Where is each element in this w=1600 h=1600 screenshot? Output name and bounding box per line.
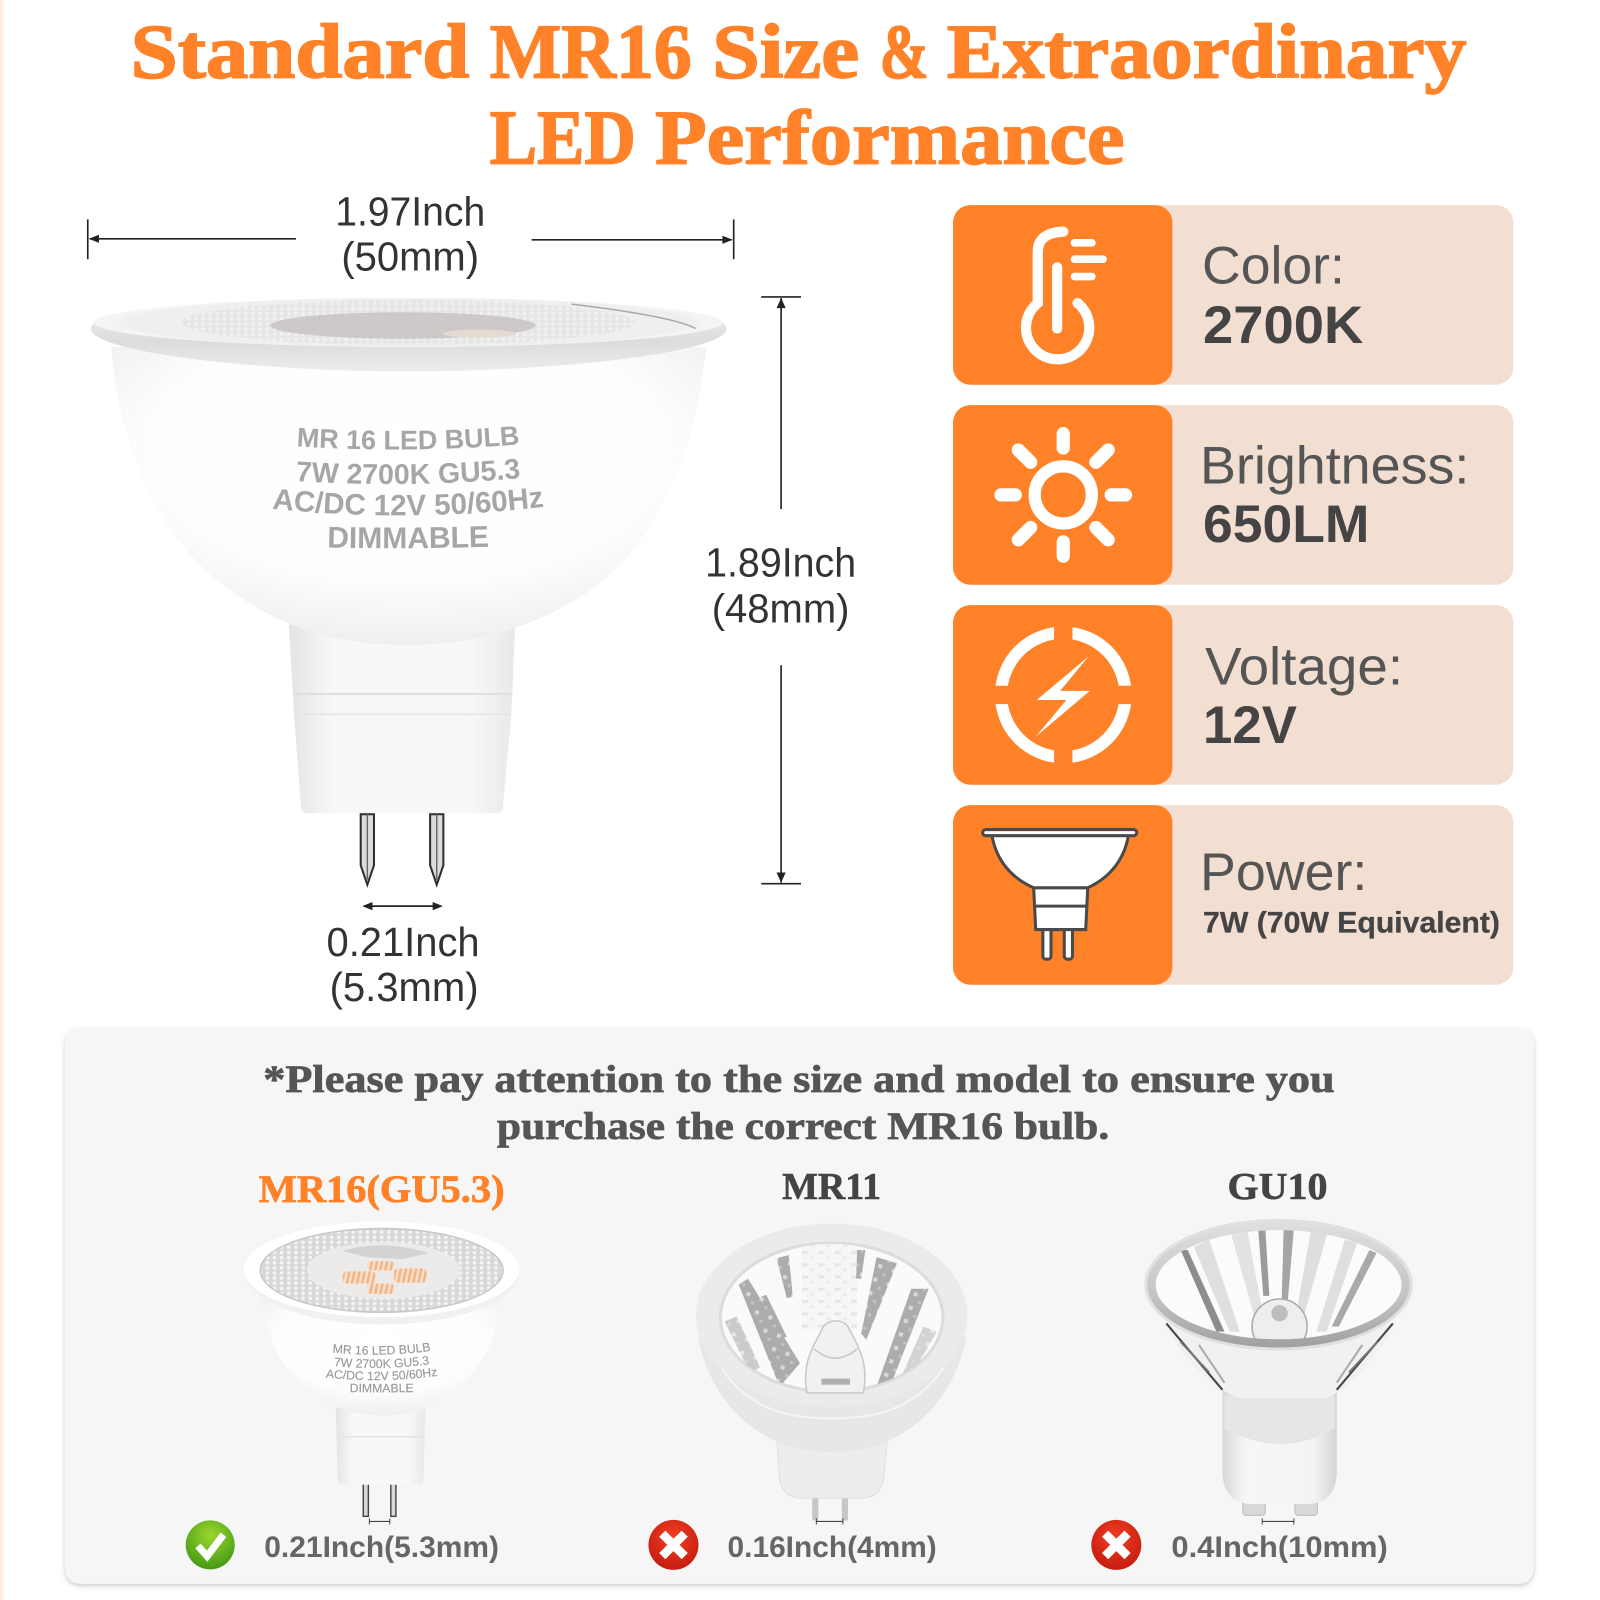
text: color value: [1202, 237, 1363, 355]
text: voltage value: 12V: [1203, 696, 1298, 755]
dimension: bulb height 1.89 inch: (48mm): [712, 585, 849, 631]
MR16 printed specs: MR 16 LED BULB: [333, 1342, 430, 1355]
title: MR16: [490, 9, 692, 95]
heading: MR11: MR11: [782, 1166, 881, 1208]
heading: MR16: MR16(GU5.3): [259, 1168, 505, 1211]
title: &: [880, 9, 929, 95]
text: brightness value: Brightness:: [1200, 437, 1469, 496]
icon: red cross two: [1091, 1520, 1141, 1570]
bulb pins: [361, 814, 443, 885]
panel: brightness spec: [953, 405, 1513, 585]
dimension: pin spacing 0.21 inch: [327, 902, 480, 1010]
title: Size: [712, 9, 859, 95]
text: voltage value: [1203, 638, 1403, 755]
bulb reflector body: [111, 347, 706, 645]
title: Standard: [131, 9, 469, 95]
MR16 bulb photo: [244, 1222, 519, 1524]
title: Performance: [655, 94, 1124, 180]
GU10 bulb photo: [1146, 1220, 1411, 1524]
bulb printed specs: [272, 426, 544, 548]
panel: color spec: [953, 205, 1513, 385]
dimension: bulb height 1.89 inch: [705, 297, 856, 884]
dimension: pin spacing 0.21 inch: (5.3mm): [330, 964, 479, 1010]
notice heading: *Please pay attention to the size and model to ensure you: [263, 1058, 1335, 1101]
text: color value: 2700K: [1203, 296, 1363, 355]
bulb printed specs: 7W 2700K GU5.3: [298, 458, 520, 484]
icon: green check: [186, 1520, 235, 1569]
text: brightness value: 650LM: [1203, 495, 1369, 554]
bulb printed specs: MR 16 LED BULB: [298, 426, 518, 450]
notice heading: purchase the correct MR16 bulb.: [497, 1105, 1109, 1148]
dimension: bulb height 1.89 inch: 1.89Inch: [705, 540, 856, 586]
icon: thermometer: [1026, 232, 1103, 359]
bulb neck and base: [289, 624, 515, 813]
title: [131, 9, 1467, 180]
heading: GU10: GU10: [1228, 1166, 1328, 1208]
bulb printed specs: DIMMABLE: [329, 526, 488, 548]
notice heading: [263, 1058, 1335, 1148]
MR16 printed specs: AC/DC 12V 50/60Hz: [326, 1368, 438, 1380]
panel: power spec: [953, 805, 1513, 985]
label: MR11 pin spacing: 0.16Inch(4mm): [728, 1531, 937, 1564]
title: LED: [490, 94, 636, 180]
text: power value: [1200, 843, 1500, 940]
label: GU10 pin spacing: 0.4Inch(10mm): [1171, 1531, 1388, 1564]
dimension: bulb width 1.97 inch: 1.97Inch: [335, 189, 485, 235]
dimension: bulb width 1.97 inch: [88, 189, 734, 279]
MR16 printed specs: DIMMABLE: [350, 1384, 414, 1392]
dimension: bulb width 1.97 inch: (50mm): [341, 233, 479, 279]
MR11 bulb photo: [696, 1223, 967, 1524]
main MR16 bulb illustration: [90, 298, 726, 888]
label: MR16 pin spacing: 0.21Inch(5.3mm): [264, 1531, 499, 1564]
icon: red cross one: [648, 1520, 698, 1570]
bulb rim and lens: [91, 296, 727, 371]
MR16 printed specs: [326, 1342, 438, 1392]
icon: lightning ring: [991, 622, 1136, 767]
text: power value: 7W (70W Equivalent): [1203, 907, 1500, 940]
panel: voltage spec: [953, 605, 1513, 785]
text: color value: Color:: [1202, 237, 1345, 296]
text: voltage value: Voltage:: [1205, 638, 1403, 697]
title: Extraordinary: [947, 9, 1467, 95]
icon: sun: [1001, 434, 1126, 556]
dimension: pin spacing 0.21 inch: 0.21Inch: [327, 919, 480, 965]
text: brightness value: [1200, 437, 1469, 554]
panel: bulb comparison: [62, 1028, 1536, 1588]
bulb printed specs: AC/DC 12V 50/60Hz: [272, 488, 544, 516]
text: power value: Power:: [1200, 843, 1367, 902]
icon: bulb outline: [983, 830, 1137, 959]
MR16 printed specs: 7W 2700K GU5.3: [335, 1356, 429, 1368]
